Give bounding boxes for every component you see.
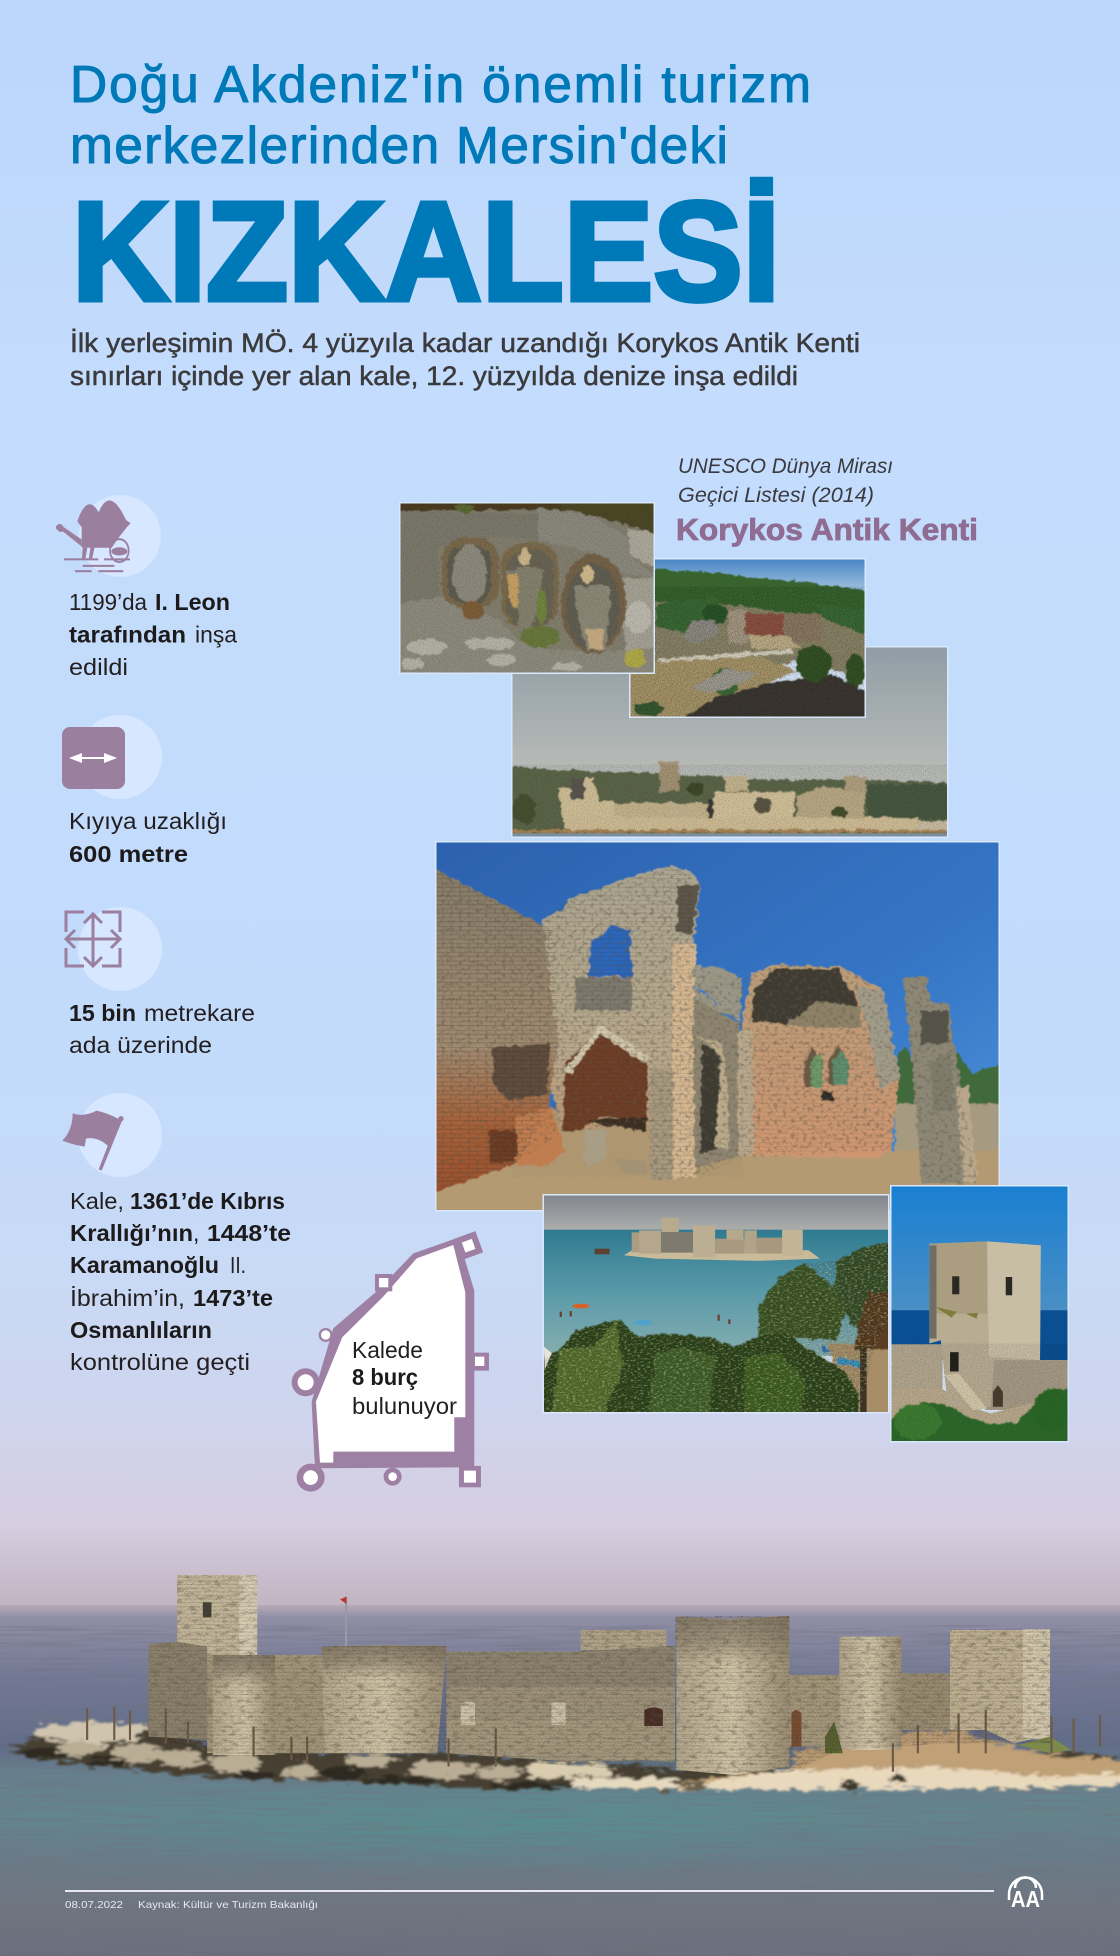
photo: bottom sea and Kizkalesi castle panorama (0, 1573, 1120, 1956)
text: tarafından (69, 622, 186, 648)
UNESCO heading (676, 455, 978, 547)
fact 2: distance from shore (62, 715, 227, 867)
text: 1473’te (193, 1285, 273, 1311)
fortress plan with 8 towers (292, 1231, 489, 1492)
square tower east (950, 1630, 1050, 1743)
text: Krallığı’nın (70, 1220, 193, 1246)
text: , (193, 1220, 199, 1246)
palms right (833, 1242, 894, 1347)
castle (624, 1250, 820, 1261)
UNESCO heading: Korykos Antik Kenti (676, 512, 978, 547)
icon: flag (62, 1093, 162, 1177)
text (69, 589, 237, 680)
text: İbrahim’in, (70, 1285, 185, 1311)
footer (65, 1878, 1042, 1912)
text: Karamanoğlu (70, 1252, 219, 1278)
title (70, 55, 811, 330)
round tower 1 (321, 1645, 446, 1753)
facade (542, 866, 700, 1180)
intro text (70, 327, 860, 391)
photo: rock reliefs (393, 497, 661, 679)
text: inşa (195, 622, 237, 648)
label: 8 burç (352, 1364, 418, 1390)
statues (453, 544, 487, 603)
bushes (888, 1388, 1075, 1444)
boats (595, 1249, 610, 1254)
beach at right (826, 1343, 894, 1418)
sandy ground (679, 1730, 1120, 1791)
text: edildi (69, 654, 128, 680)
ground (428, 1150, 1006, 1217)
apse (740, 964, 899, 1158)
big round tower (676, 1616, 789, 1775)
castle island (14, 1573, 1120, 1791)
text: Osmanlıların (70, 1317, 212, 1343)
photo: beach view of Kizkalesi (538, 1194, 894, 1418)
round tower 2 (839, 1637, 901, 1750)
east wall (789, 1675, 839, 1747)
palms front (538, 1320, 860, 1418)
text: ada üzerinde (69, 1032, 212, 1058)
fact 1: built by Leon (56, 495, 237, 680)
UNESCO heading: Geçici Listesi (2014) (678, 484, 874, 507)
text (69, 1000, 255, 1058)
label: Kalede (352, 1337, 423, 1363)
text: 15 bin (69, 1000, 136, 1026)
text: Kıyıya uzaklığı (69, 808, 227, 834)
stone texture (143, 1573, 1057, 1780)
trees (895, 1047, 1006, 1107)
main wall (446, 1646, 675, 1762)
icon: expand arrows (66, 907, 162, 991)
photo: Byzantine church ruins (428, 841, 1006, 1217)
text: metrekare (144, 1000, 255, 1026)
text: Kale, (70, 1188, 124, 1214)
side walls (888, 1344, 943, 1393)
block on ground (583, 1130, 606, 1167)
icon: distance arrow (62, 715, 162, 799)
left square tower (177, 1575, 257, 1655)
bush (1018, 1737, 1071, 1753)
text: 1199’da (69, 589, 147, 615)
icon: wheelbarrow (56, 495, 161, 577)
source: Kaynak: Kültür ve Turizm Bakanlığı (138, 1899, 318, 1911)
back block (581, 1630, 666, 1650)
right pillar (904, 976, 977, 1183)
sea (0, 1605, 1120, 1956)
label (352, 1337, 457, 1419)
text (70, 1188, 291, 1375)
niches (442, 537, 499, 608)
text: 1361’de Kıbrıs (130, 1188, 285, 1214)
title line 2: merkezlerinden Mersin'deki (70, 116, 728, 174)
label: bulunuyor (352, 1393, 457, 1419)
logo: Anadolu Agency (1009, 1878, 1042, 1912)
plants (462, 601, 484, 620)
text: 600 metre (69, 841, 188, 867)
title line 1: Doğu Akdeniz'in önemli turizm (70, 55, 811, 113)
lamp posts (87, 1707, 1100, 1772)
plan drawing (292, 1231, 489, 1492)
flag (345, 1597, 347, 1647)
text: I. Leon (155, 589, 230, 615)
far left walls (149, 1642, 207, 1740)
text: II. (230, 1252, 246, 1278)
date: 08.07.2022 (65, 1899, 123, 1911)
masonry texture (436, 864, 998, 1197)
fact 3: island area (66, 907, 255, 1058)
text: kontrolüne geçti (70, 1349, 250, 1375)
UNESCO heading: UNESCO Dünya Mirası (678, 455, 893, 478)
intro text: İlk yerleşimin MÖ. 4 yüzyıla kadar uzandığı Korykos Antik Kenti (70, 327, 860, 358)
rocks and shore (14, 1722, 1120, 1791)
photo: aerial view of ruins (623, 558, 873, 724)
middle arch and wall (693, 966, 742, 1020)
fact 4: history of control (62, 1093, 291, 1375)
photo: stone tower (888, 1185, 1075, 1444)
text (69, 808, 227, 867)
big wall (428, 866, 558, 1195)
logo: Anadolu Agency: AA (1011, 1886, 1040, 1912)
photo: Korykos castle from the sea (505, 646, 955, 842)
tower (929, 1241, 1041, 1407)
divider line (65, 1890, 994, 1892)
title main word: KIZKALESİ (72, 172, 780, 330)
foliage texture (544, 1242, 888, 1412)
intro text: sınırları içinde yer alan kale, 12. yüzyılda denize inşa edildi (70, 361, 798, 391)
text: 1448’te (207, 1220, 291, 1246)
